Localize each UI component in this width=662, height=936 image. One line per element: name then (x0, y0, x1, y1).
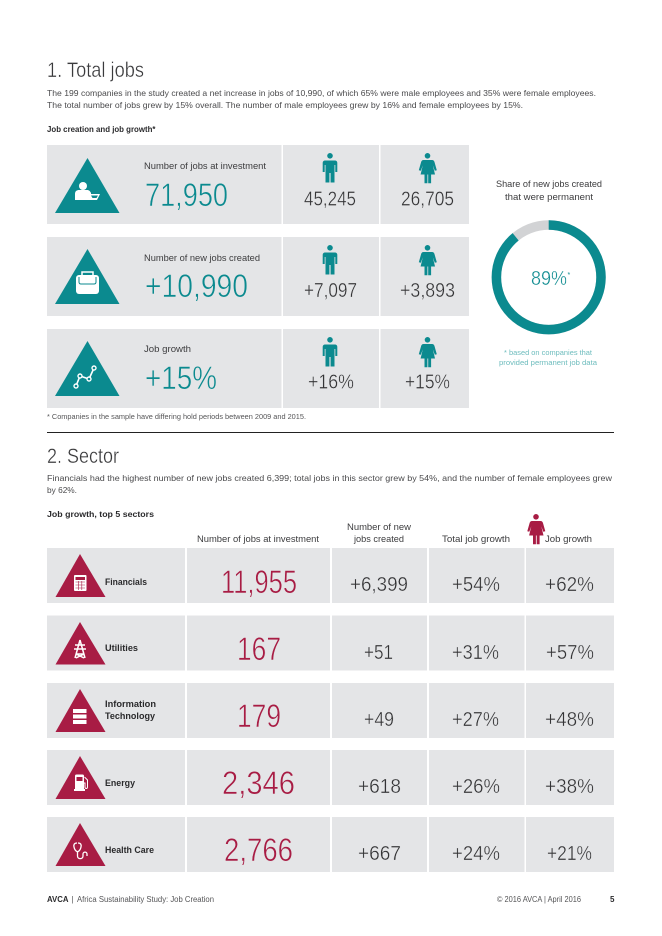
panel: job growth: +16% (308, 372, 354, 394)
table header: Number of jobs at investment (197, 533, 319, 544)
row: Energy: 2,346 (222, 765, 295, 801)
donut panel: share of permanent jobs: * based on companies that (504, 348, 593, 357)
intro text: total jobs: The total number of jobs grew by 15% overall. The number of male employees grew by 16% and female employees by 15%. (47, 100, 523, 110)
table header: Total job growth (442, 533, 510, 544)
row: Energy: Energy (105, 778, 135, 788)
row: Health Care: 2,766 (224, 832, 293, 868)
icon: female, red (527, 514, 545, 544)
row: Energy: +38% (545, 776, 594, 798)
intro text: total jobs (47, 88, 596, 110)
panel: number of new jobs created: +7,097 (304, 280, 357, 302)
icon: line chart (55, 341, 120, 396)
intro text: total jobs: The 199 companies in the study created a net increase in jobs of 10,990, of which 65% were male employees and 35% were female employees. (47, 88, 596, 98)
row: Health Care: +21% (547, 843, 592, 865)
panel: number of jobs at investment: Number of jobs at investment (144, 160, 266, 171)
row: Financials (47, 548, 614, 603)
row: Health Care: +667 (358, 843, 401, 865)
icon: pylon (56, 622, 106, 664)
row: Information Technology: +48% (545, 709, 594, 731)
table header (197, 514, 592, 544)
donut panel: share of permanent jobs: provided permanent job data (499, 358, 598, 367)
row: Utilities: +51 (364, 642, 393, 664)
row: Health Care: Health Care (105, 845, 154, 855)
title: 2. Sector: 2. Sector (47, 445, 119, 468)
icon: male (323, 245, 337, 274)
row: Energy: +26% (452, 776, 500, 798)
panel: number of jobs at investment: 45,245 (304, 188, 356, 210)
row: Information Technology (47, 683, 614, 738)
footer (47, 895, 615, 904)
intro text: sector (47, 473, 613, 495)
row: Financials: +54% (452, 574, 500, 596)
subheading: job growth top 5 sectors: Job growth, top 5 sectors (47, 509, 154, 519)
icon: male (323, 153, 337, 182)
donut panel: share of permanent jobs: 89% (531, 268, 567, 290)
panel: number of new jobs created: +3,893 (400, 280, 455, 302)
donut panel: share of permanent jobs: that were permanent (505, 191, 593, 202)
row: Information Technology: 179 (237, 698, 281, 734)
row: Utilities: +31% (452, 642, 499, 664)
panel: job growth: +15% (405, 372, 450, 394)
intro text: sector: Financials had the highest number of new jobs created 6,399; total jobs in this sector grew by 54%, and the number of female employees grew (47, 473, 613, 483)
donut panel: share of permanent jobs: * (568, 272, 570, 279)
panel: number of jobs at investment: 71,950 (145, 177, 228, 213)
footer: 5 (610, 895, 615, 904)
donut panel: share of permanent jobs (496, 178, 602, 367)
row: Energy: +618 (358, 776, 401, 798)
panel: number of jobs at investment (47, 145, 469, 224)
table header: jobs created (353, 533, 404, 544)
panel: job growth (47, 329, 469, 408)
row: Information Technology: +27% (452, 709, 499, 731)
row: Information Technology: Information (105, 699, 156, 709)
icon: calculator (56, 554, 106, 597)
icon: server (56, 689, 106, 732)
row: Information Technology: +49 (364, 709, 394, 731)
subheading: job creation and job growth: Job creation and job growth* (47, 124, 156, 134)
donut panel: share of permanent jobs: Share of new jobs created (496, 178, 602, 189)
panel: number of new jobs created (47, 237, 469, 316)
panel: number of jobs at investment: 26,705 (401, 188, 454, 210)
row: Information Technology: Technology (105, 711, 155, 721)
row: Utilities (47, 616, 614, 670)
row: Financials: 11,955 (221, 564, 297, 600)
row: Financials: +62% (545, 574, 594, 596)
panel: job growth: +15% (145, 360, 217, 396)
row: Health Care: +24% (452, 843, 500, 865)
icon: worker at laptop (55, 158, 120, 213)
title: 1. Total jobs: 1. Total jobs (47, 59, 144, 82)
row: Health Care (47, 817, 614, 872)
icon: stethoscope (56, 823, 106, 866)
footnote: hold periods: * Companies in the sample have differing hold periods between 2009 and 2015. (47, 412, 306, 421)
row: Financials: Financials (105, 577, 147, 587)
row: Utilities: Utilities (105, 643, 138, 653)
row: Financials: +6,399 (350, 574, 408, 596)
panel: number of new jobs created: Number of new jobs created (144, 252, 260, 263)
table header: Number of new (347, 521, 411, 532)
icon: female (419, 153, 437, 183)
footer: © 2016 AVCA | April 2016 (497, 895, 582, 904)
icon: briefcase (55, 249, 120, 304)
donut chart: 89% (496, 225, 601, 330)
row: Utilities: +57% (546, 642, 594, 664)
footer: | (72, 895, 74, 904)
footer: AVCA (47, 895, 69, 904)
icon: female (419, 245, 437, 275)
row: Utilities: 167 (237, 631, 281, 667)
icon: fuel pump (56, 756, 106, 799)
table header: Job growth (545, 533, 592, 544)
icon: female (419, 337, 437, 367)
icon: male (323, 337, 337, 366)
panel: number of new jobs created: +10,990 (145, 268, 248, 304)
row: Energy (47, 750, 614, 805)
panel: job growth: Job growth (144, 343, 191, 354)
intro text: sector: by 62%. (47, 485, 77, 495)
footer: Africa Sustainability Study: Job Creation (77, 895, 214, 904)
